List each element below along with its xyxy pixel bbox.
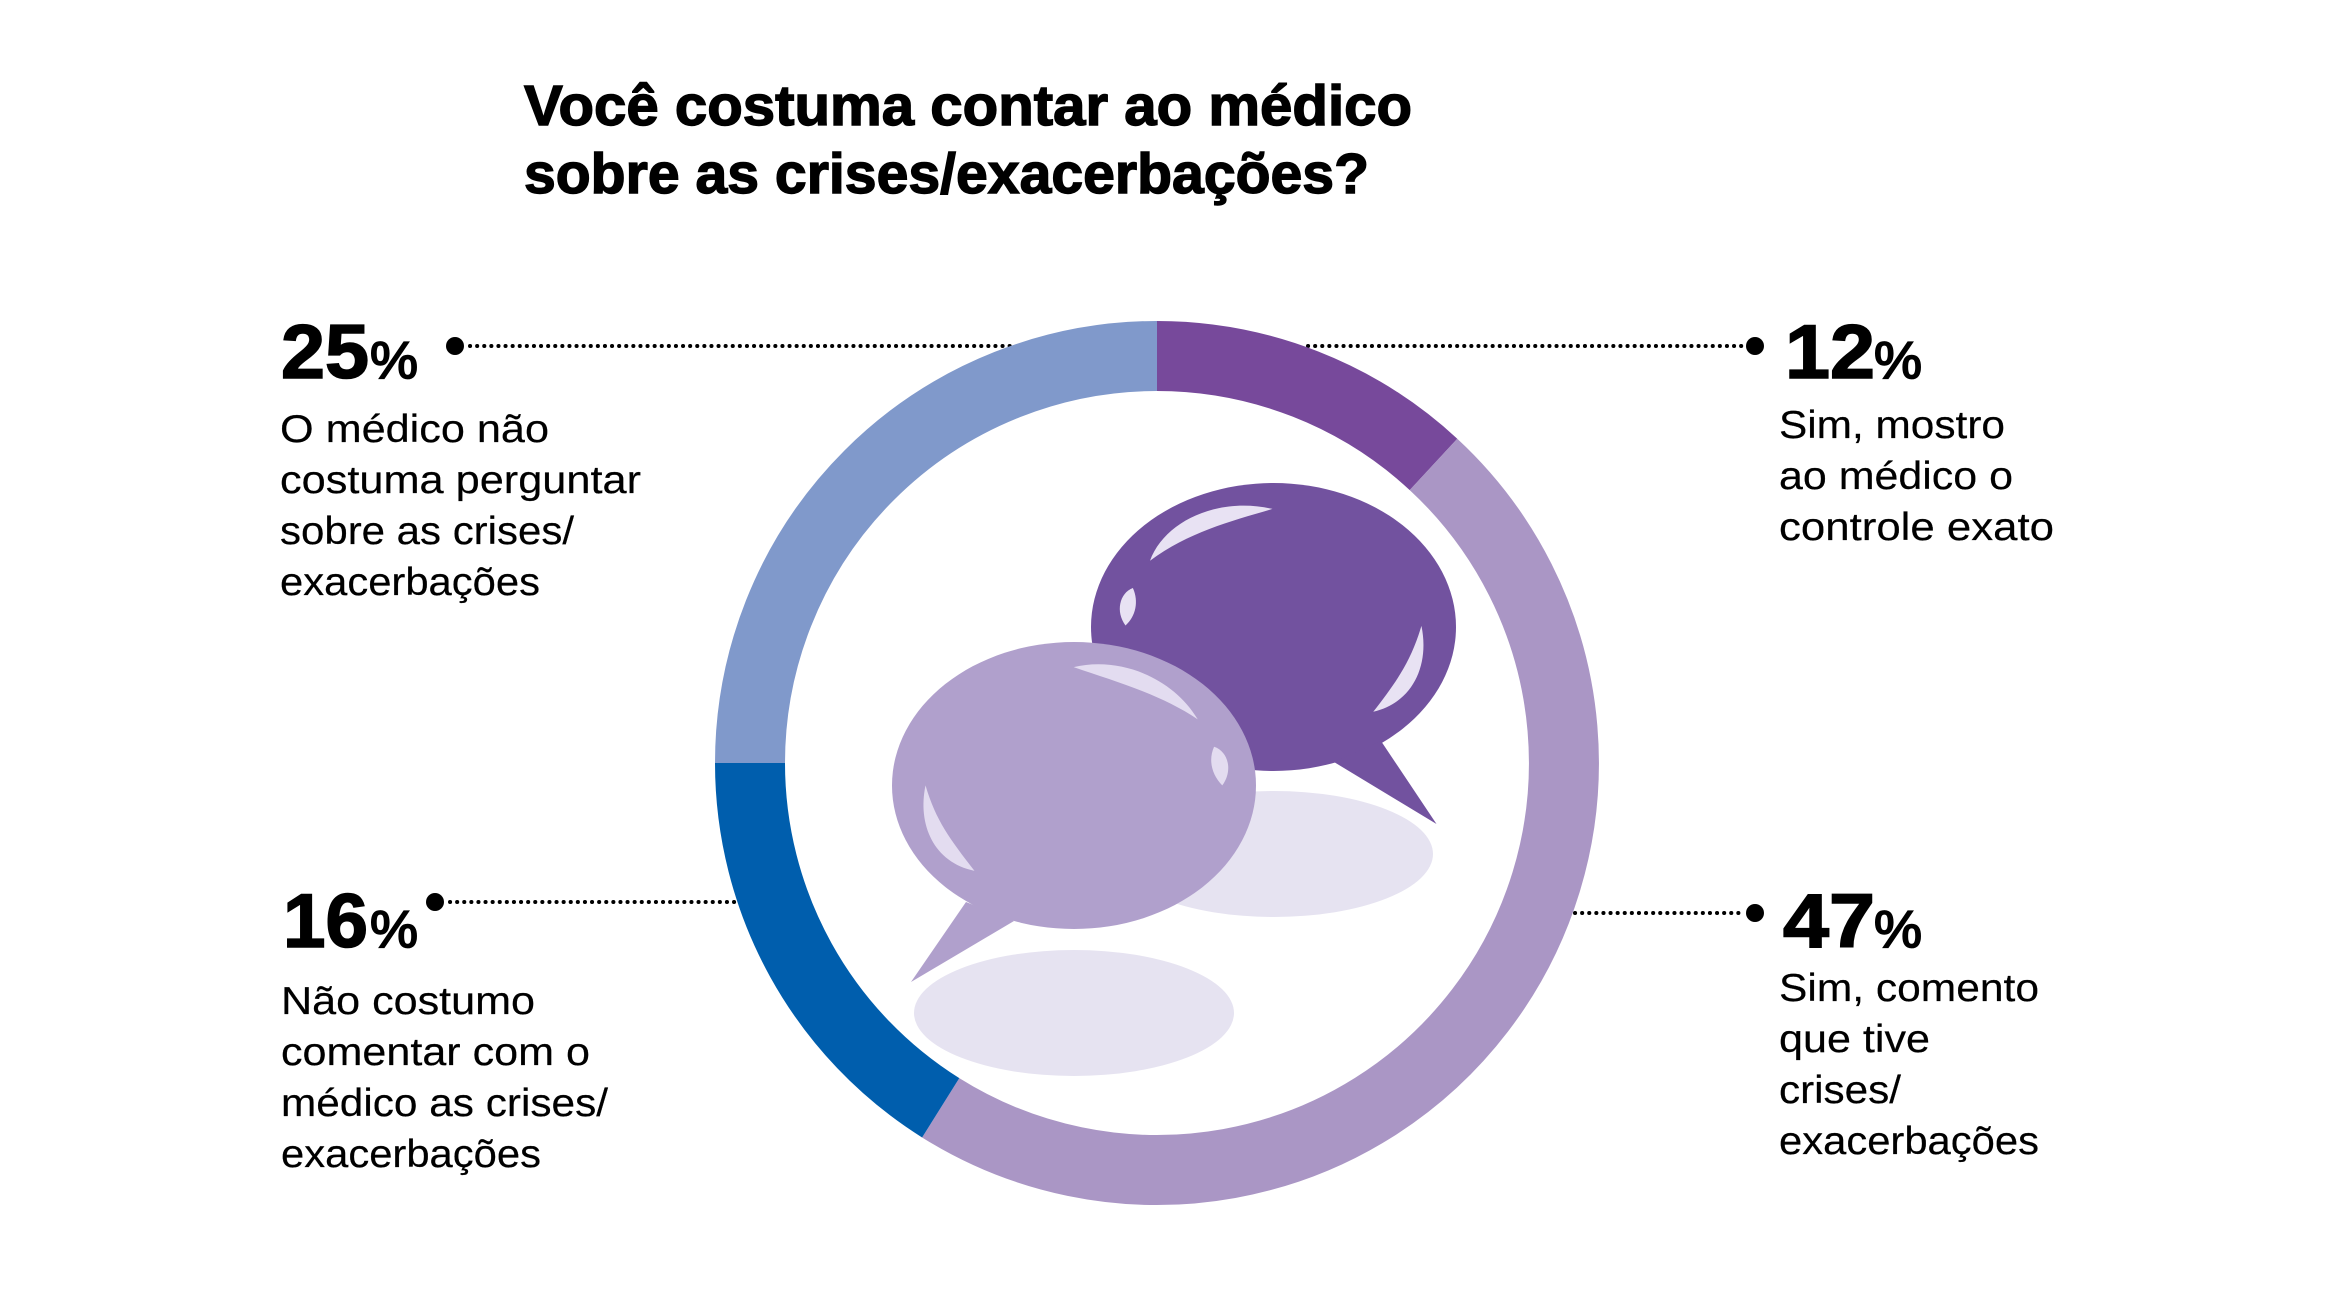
callout: 12%: ao médico o bbox=[1779, 455, 2013, 498]
shadow: dark bubble bbox=[1115, 791, 1433, 917]
title: Você costuma contar ao médico bbox=[524, 74, 1412, 138]
callout: 16% bbox=[281, 879, 608, 1176]
callout: 16%: exacerbações bbox=[281, 1133, 541, 1176]
leader line: 12% bbox=[1308, 337, 1764, 355]
callout: 12%: 12 bbox=[1785, 310, 1875, 395]
callout: 47%: % bbox=[1874, 901, 1922, 959]
callout: 16%: Não costumo bbox=[281, 980, 535, 1023]
callout: 12%: % bbox=[1874, 332, 1922, 390]
segment: 12% bbox=[1157, 356, 1434, 464]
callout: 12% bbox=[1779, 310, 2054, 549]
callout: 25%: O médico não bbox=[280, 408, 549, 451]
light speech bubble bbox=[892, 642, 1256, 982]
dark speech bubble bbox=[1091, 483, 1456, 824]
callout: 25% bbox=[280, 310, 641, 604]
highlights: light bubble bbox=[923, 664, 1228, 871]
leader line: 25% bbox=[446, 337, 1010, 355]
callout: 47%: 47 bbox=[1783, 879, 1875, 964]
leader line: 16% bbox=[426, 893, 737, 911]
title bbox=[524, 74, 1412, 206]
callout: 12%: Sim, mostro bbox=[1779, 404, 2005, 447]
callout: 47%: que tive bbox=[1779, 1018, 1930, 1061]
callout: 25%: costuma perguntar bbox=[280, 459, 641, 502]
callout: 25%: exacerbações bbox=[280, 561, 540, 604]
callout: 16%: % bbox=[370, 901, 418, 959]
callout: 47%: exacerbações bbox=[1779, 1120, 2039, 1163]
callout: 25%: sobre as crises/ bbox=[280, 510, 574, 553]
highlights: dark bubble bbox=[1120, 506, 1423, 712]
segment: 25% bbox=[750, 356, 1157, 763]
segment: 16% bbox=[750, 763, 941, 1108]
segment: 47% bbox=[941, 464, 1564, 1170]
donut chart bbox=[750, 356, 1564, 1170]
callout: 25%: 25 bbox=[281, 310, 369, 395]
callout: 47% bbox=[1779, 879, 2039, 1163]
callout: 47%: crises/ bbox=[1779, 1069, 1901, 1112]
icon: speech bubbles bbox=[892, 483, 1456, 1076]
callout: 47%: Sim, comento bbox=[1779, 967, 2039, 1010]
title: sobre as crises/exacerbações? bbox=[524, 142, 1369, 206]
shadow: light bubble bbox=[914, 950, 1234, 1076]
callout: 16%: comentar com o bbox=[281, 1031, 590, 1074]
leader line: 47% bbox=[1575, 904, 1764, 922]
callout: 16%: médico as crises/ bbox=[281, 1082, 608, 1125]
callout: 16%: 16 bbox=[283, 879, 368, 964]
callout: 12%: controle exato bbox=[1779, 506, 2054, 549]
callout: 25%: % bbox=[370, 332, 418, 390]
